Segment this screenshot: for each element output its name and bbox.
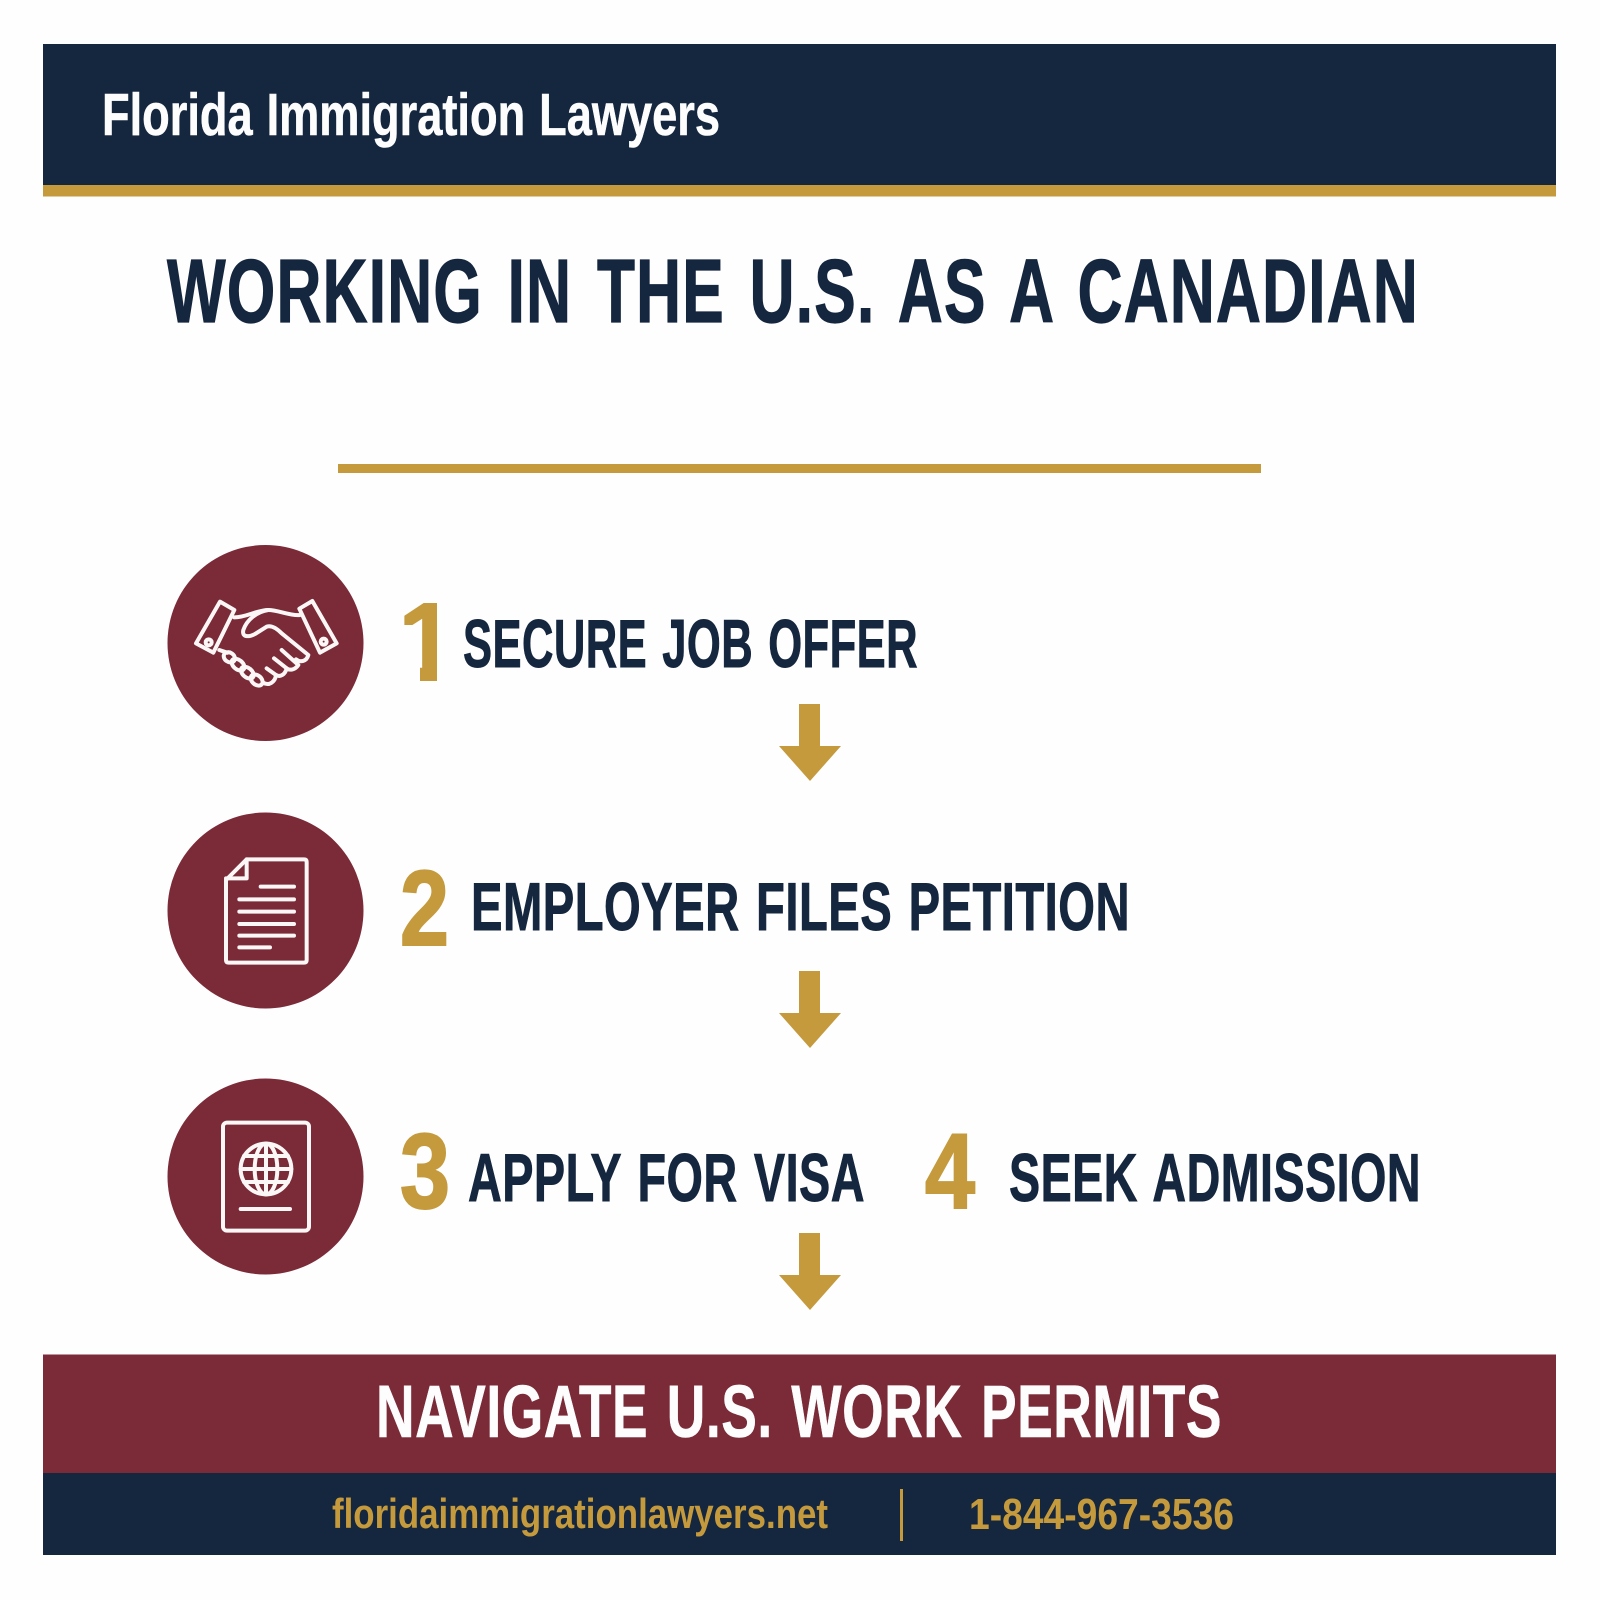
firm name: Florida Immigration Lawyers bbox=[102, 82, 720, 148]
label: employer files petition: EMPLOYER FILES PETITION bbox=[471, 869, 1130, 945]
contact band bbox=[43, 1473, 1556, 1555]
call to action band bbox=[43, 1354, 1556, 1474]
call to action text: NAVIGATE U.S. WORK PERMITS bbox=[376, 1370, 1222, 1453]
arrow 3 bbox=[779, 1233, 841, 1310]
phone: 1-844-967-3536 bbox=[969, 1490, 1234, 1539]
step 2 bbox=[168, 812, 1130, 1008]
arrow 1 bbox=[779, 704, 841, 781]
label: apply for visa: APPLY FOR VISA bbox=[468, 1140, 865, 1216]
arrow 2 bbox=[779, 971, 841, 1048]
number 4: 4 bbox=[925, 1111, 975, 1231]
website: floridaimmigrationlawyers.net bbox=[332, 1490, 828, 1537]
step 1 bbox=[168, 545, 918, 741]
icon: passport bbox=[168, 1078, 364, 1274]
label: secure job offer: SECURE JOB OFFER bbox=[463, 606, 918, 682]
label: seek admission: SEEK ADMISSION bbox=[1009, 1140, 1421, 1216]
number 2: 2 bbox=[400, 848, 449, 968]
step 3 bbox=[168, 1078, 865, 1274]
number 3: 3 bbox=[400, 1111, 450, 1231]
divider bbox=[900, 1489, 903, 1541]
header band bbox=[43, 44, 1556, 196]
title rule bbox=[338, 464, 1261, 473]
icon: handshake bbox=[168, 545, 364, 741]
icon: document bbox=[168, 812, 364, 1008]
step 4 bbox=[925, 1111, 1421, 1231]
number 1: 1 bbox=[398, 581, 458, 704]
